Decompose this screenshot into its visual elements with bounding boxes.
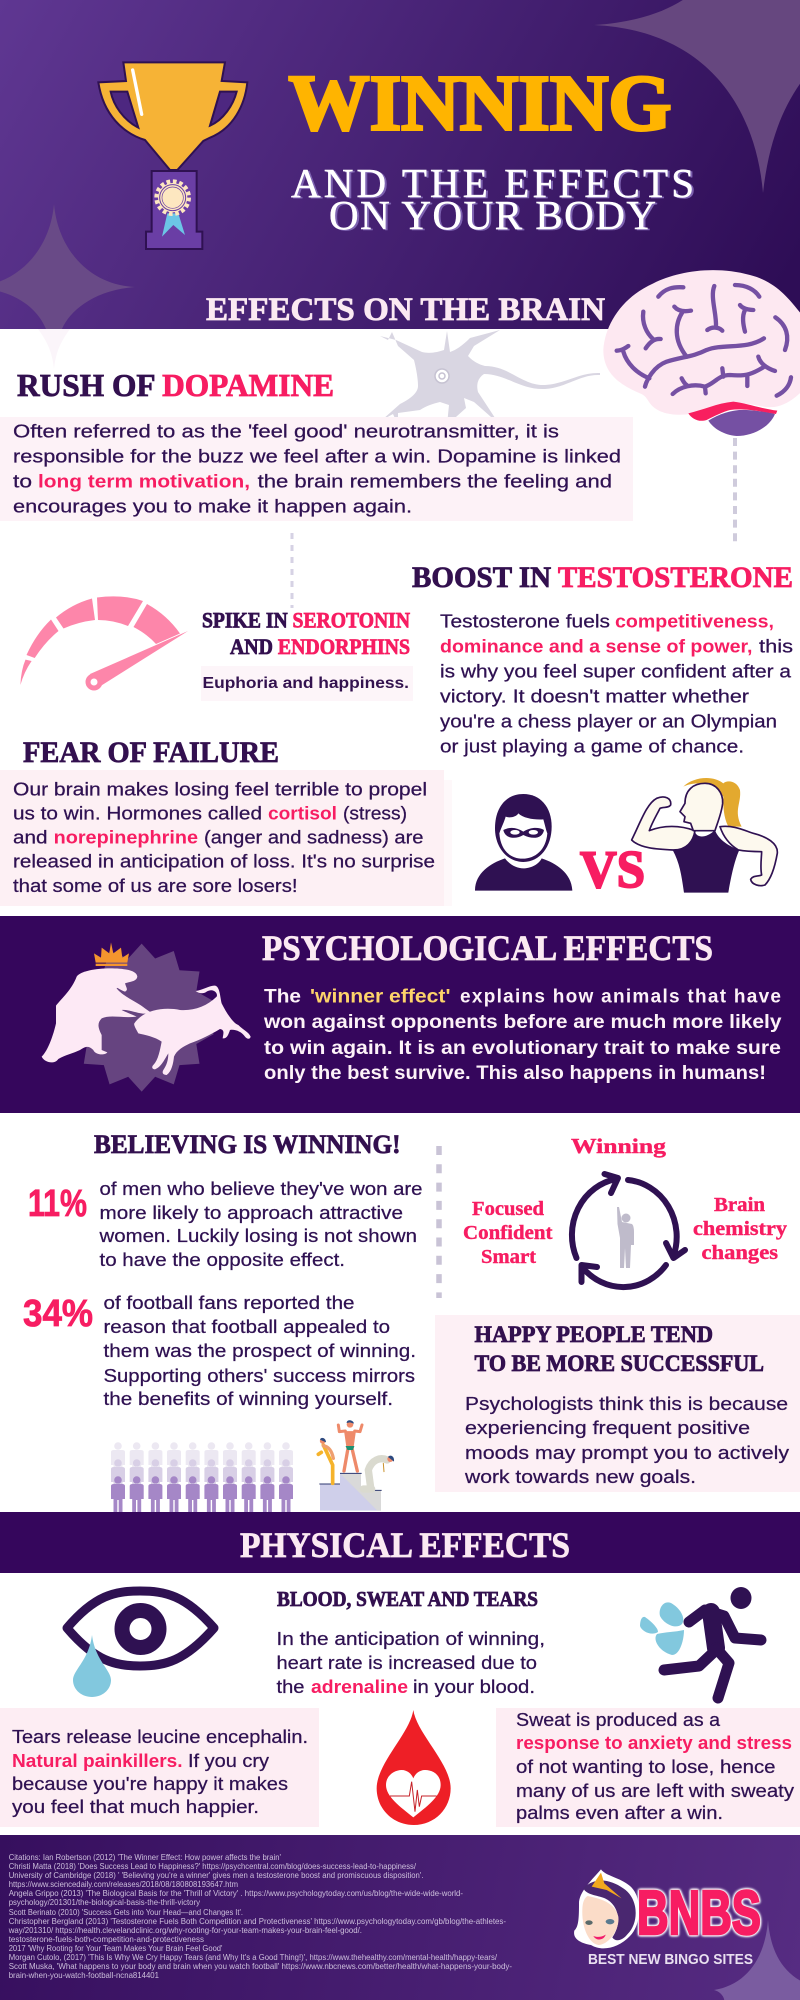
text: winner effect: explains how animals that have <box>460 986 781 1008</box>
citations: University of Cambridge (2018) ' 'Believing you're a winner' gives men a testosterone boost and promiscuous disposition'. <box>9 1870 423 1880</box>
stat: 34 percent: reason that football appealed to <box>104 1316 390 1337</box>
title: WINNING <box>288 60 672 148</box>
heading: spike in serotonin: SPIKE IN SEROTONIN <box>202 608 410 632</box>
panel: fear of failure text <box>0 770 452 906</box>
stat: 11 percent: 11% <box>28 1183 87 1225</box>
panel: tears: you feel that much happier. <box>12 1796 259 1817</box>
citations: testosterone-fuels-both-competition-and-protectiveness <box>9 1934 204 1944</box>
text: blood sweat and tears: BLOOD, SWEAT AND TEARS <box>277 1587 538 1611</box>
citations: Scott Muska, 'What happens to your body and brain when you watch football' https://www.nbcnews.com/better/health/what-happens-your-body- <box>9 1961 512 1971</box>
stat: 34 percent: 34% <box>23 1293 93 1335</box>
panel: dopamine text: long term motivation, <box>38 470 250 492</box>
stat: 34 percent: of football fans reported the <box>104 1292 354 1313</box>
panel: sweat <box>496 1708 800 1827</box>
panel: dopamine text: the brain remembers the feeling and <box>258 470 612 492</box>
panel: happy people: experiencing frequent positive <box>465 1417 750 1438</box>
heading: boost in testosterone: BOOST IN TESTOSTERONE <box>412 561 793 594</box>
heading: rush of dopamine: RUSH OF DOPAMINE <box>17 367 334 403</box>
text: blood sweat and tears: the <box>276 1676 304 1697</box>
panel: fear of failure text: Our brain makes losing feel terrible to propel <box>13 778 427 799</box>
panel: euphoria: Euphoria and happiness. <box>202 675 409 692</box>
panel: header background <box>0 0 800 329</box>
citations <box>8 1852 512 1980</box>
panel: happy people <box>435 1315 800 1492</box>
text: testosterone: is why you feel super confident after a <box>440 660 792 682</box>
icon: running figure with sweat <box>640 1587 761 1698</box>
icon: neuron <box>380 330 600 425</box>
panel: sweat: response to anxiety and stress <box>516 1732 792 1753</box>
panel: fear of failure text: released in anticipation of loss. It's no surprise <box>13 850 435 872</box>
citations: Citations: Ian Robertson (2012) 'The Winner Effect: How power affects the brain' <box>9 1852 281 1862</box>
icon: eye with tear <box>67 1591 214 1697</box>
panel: footer <box>0 1835 800 2000</box>
label: focused confident smart: Smart <box>481 1247 537 1268</box>
heading: spike in serotonin <box>202 608 410 659</box>
citations: psychology/201301/the-biological-basis-the-thrill-victory <box>9 1897 201 1907</box>
stat: 34 percent: them was the prospect of winning. <box>104 1340 416 1361</box>
text: testosterone: victory. It doesn't matter whether <box>440 686 749 706</box>
text: blood sweat and tears: heart rate is increased due to <box>276 1652 537 1673</box>
panel: tears: Natural painkillers. <box>12 1750 183 1771</box>
label: brain chemistry changes: chemistry <box>693 1219 787 1240</box>
text: vs: VS <box>580 841 645 899</box>
text: blood sweat and tears: in your blood. <box>413 1676 535 1697</box>
stat: 34 percent: the benefits of winning yourself. <box>104 1388 393 1409</box>
citations: Christopher Bergland (2013) 'Testosterone Fuels Both Competition and Protectiveness' https://www.psychologytoday.com/gb/blog/the-athletes- <box>9 1916 506 1926</box>
icon: blood drop with heart <box>377 1710 451 1825</box>
panel: fear of failure text: norepinephrine <box>54 827 198 848</box>
icon: brain <box>603 270 800 436</box>
panel: sweat: Sweat is produced as a <box>516 1709 721 1730</box>
text: blood sweat and tears <box>276 1587 545 1697</box>
panel: fear of failure text: (anger and sadness) are <box>204 827 424 848</box>
panel: fear of failure text: us to win. Hormones called <box>13 802 262 823</box>
text: testosterone: you're a chess player or an Olympian <box>440 710 777 732</box>
citations: way/201310/ https://health.clevelandclinic.org/why-rooting-for-your-team-makes-your-brain-feel-good/. <box>8 1925 362 1935</box>
text: testosterone: dominance and a sense of power, <box>440 636 752 656</box>
panel: psychological effects <box>0 916 800 1113</box>
subtitle <box>291 160 694 238</box>
panel: dopamine text: responsible for the buzz we feel after a win. Dopamine is linked <box>13 446 621 466</box>
icon: nerd vs athlete <box>475 778 777 893</box>
panel: fear of failure text: that some of us are sore losers! <box>13 875 298 896</box>
panel: fear of failure text: (stress) <box>343 802 407 823</box>
subtitle: ON YOUR BODY <box>329 192 656 238</box>
citations: Morgan Cutolo, (2017) 'This Is Why We Cry Happy Tears (and Why It's a Good Thing!)', https://www.thehealthy.com/mental-health/happy-tears/ <box>9 1952 498 1962</box>
dotted connector: brain <box>733 438 737 546</box>
subtitle: AND THE EFFECTS <box>291 160 694 206</box>
text: testosterone: this <box>759 636 793 656</box>
icon: gauge <box>20 596 188 690</box>
chart: winning cycle <box>463 1134 787 1287</box>
panel: dopamine text: to <box>13 470 32 492</box>
label: brain chemistry changes: changes <box>702 1243 778 1264</box>
panel: tears: If you cry <box>188 1750 270 1771</box>
panel: physical effects band <box>0 1512 800 1573</box>
panel: happy people: Psychologists think this is because <box>465 1393 788 1414</box>
heading: fear of failure: FEAR OF FAILURE <box>23 736 279 769</box>
dotted divider <box>436 1146 442 1298</box>
text: winner effect: 'winner effect' <box>310 986 450 1008</box>
stat: 11 percent: women. Luckily losing is not shown <box>98 1225 417 1246</box>
heading: spike in serotonin: AND ENDORPHINS <box>230 634 410 659</box>
icon: bear and bull <box>42 942 251 1092</box>
label: brain chemistry changes: Brain <box>714 1195 765 1216</box>
panel: happy people: work towards new goals. <box>464 1466 696 1487</box>
panel: sweat: of not wanting to lose, hence <box>516 1756 776 1777</box>
arrows: cycle <box>572 1174 685 1287</box>
panel: sweat: many of us are left with sweaty <box>516 1780 795 1801</box>
heading: effects on the brain: EFFECTS ON THE BRAIN <box>206 292 605 328</box>
citations: https://www.sciencedaily.com/releases/2018/08/180808193647.htm <box>9 1879 238 1889</box>
panel: tears: Tears release leucine encephalin. <box>12 1726 308 1747</box>
stat: 11 percent: more likely to approach attractive <box>100 1202 403 1223</box>
label: focused confident smart: Focused <box>472 1199 544 1220</box>
text: winner effect: The <box>264 986 301 1008</box>
logo: BNBS: BEST NEW BINGO SITES <box>588 1952 753 1968</box>
label: focused confident smart <box>463 1199 553 1268</box>
panel: euphoria <box>201 666 413 701</box>
text: winner effect: to win again. It is an evolutionary trait to make sure <box>264 1038 781 1059</box>
dotted connector: gauge <box>290 533 294 608</box>
label: brain chemistry changes <box>693 1195 787 1264</box>
panel: dopamine text: Often referred to as the 'feel good' neurotransmitter, it is <box>13 420 559 442</box>
panel: fear of failure text: cortisol <box>268 802 337 823</box>
text: testosterone: competitiveness, <box>615 610 774 632</box>
icon: crowd <box>111 1442 293 1514</box>
panel: happy people: HAPPY PEOPLE TEND <box>474 1322 713 1347</box>
text: testosterone: Testosterone fuels <box>440 610 610 632</box>
heading: psychological effects: PSYCHOLOGICAL EFFECTS <box>262 928 713 968</box>
stat: 34 percent <box>23 1292 416 1409</box>
citations: Scott Berinato (2010) 'Success Gets into Your Head—and Changes It'. <box>9 1907 243 1917</box>
stat: 11 percent: to have the opposite effect. <box>100 1249 345 1270</box>
icon: trophy <box>98 62 247 249</box>
citations: Angela Grippo (2013) 'The Biological Basis for the 'Thrill of Victory' . https://www.psychologytoday.com/us/blog/the-wide-wide-world- <box>9 1888 463 1898</box>
stat: 11 percent <box>28 1178 422 1270</box>
icon: podium <box>318 1420 394 1511</box>
text: blood sweat and tears: In the anticipation of winning, <box>276 1628 545 1649</box>
panel: happy people: TO BE MORE SUCCESSFUL <box>474 1351 764 1376</box>
label: focused confident smart: Confident <box>463 1223 553 1244</box>
panel: fear of failure text: and <box>13 827 48 848</box>
text: testosterone: or just playing a game of chance. <box>440 736 744 756</box>
text: winner effect: won against opponents before are much more likely <box>263 1012 782 1033</box>
panel: dopamine text <box>0 417 633 521</box>
text: testosterone <box>440 610 793 756</box>
panel: sweat: palms even after a win. <box>516 1802 723 1823</box>
citations: 2017 'Why Rooting for Your Team Makes Your Brain Feel Good' <box>9 1943 223 1953</box>
panel: physical effects band: PHYSICAL EFFECTS <box>240 1525 570 1565</box>
panel: tears: because you're happy it makes <box>12 1773 288 1794</box>
icon: winner figure <box>617 1207 634 1268</box>
panel: happy people: moods may prompt you to actively <box>465 1442 790 1463</box>
citations: Christi Matta (2018) 'Does Success Lead to Happiness?' https://psychcentral.com/blog/does-success-lead-to-happiness/ <box>9 1861 417 1871</box>
stat: 11 percent: of men who believe they've won are <box>100 1178 422 1199</box>
text: winner effect <box>263 986 782 1084</box>
pale sparkle on white <box>38 329 70 369</box>
text: winner effect: only the best survive. This also happens in humans! <box>264 1063 766 1084</box>
panel: dopamine text: encourages you to make it happen again. <box>13 496 412 516</box>
panel: tears <box>0 1708 319 1827</box>
label: winning: Winning <box>571 1134 667 1158</box>
text: blood sweat and tears: adrenaline <box>311 1676 408 1697</box>
stat: 34 percent: Supporting others' success mirrors <box>104 1365 415 1386</box>
logo: BNBS <box>574 1869 761 1968</box>
heading: believing is winning: BELIEVING IS WINNING! <box>94 1130 400 1159</box>
citations: brain-when-you-watch-football-ncna814401 <box>9 1970 159 1980</box>
